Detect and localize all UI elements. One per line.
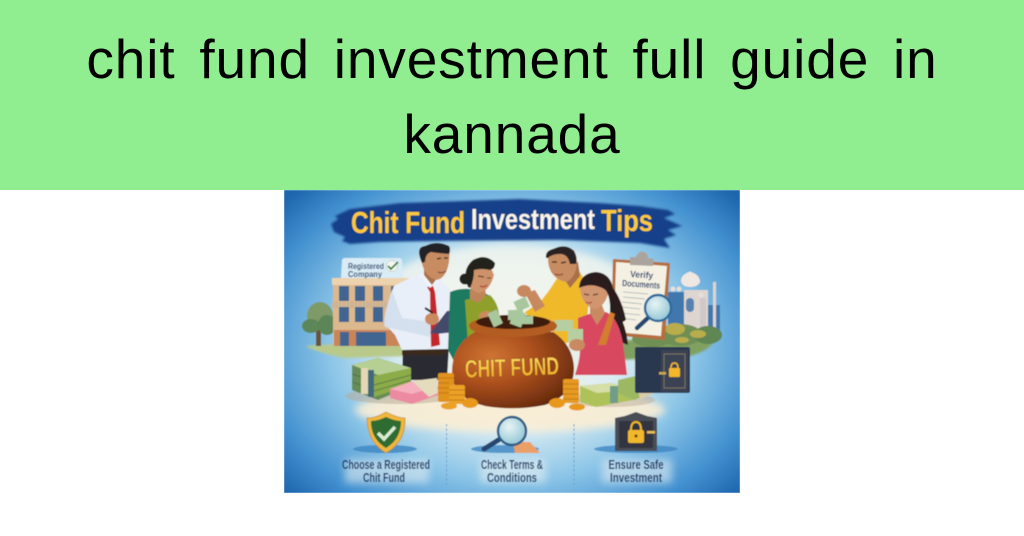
company sign: Company bbox=[348, 269, 382, 279]
clipboard verify documents bbox=[611, 252, 671, 340]
divider left bbox=[446, 424, 448, 485]
banner brush stroke bbox=[331, 199, 682, 248]
icon: safe with padlock bbox=[594, 412, 678, 453]
grass strip right bbox=[620, 338, 715, 360]
company sign bbox=[341, 258, 403, 279]
banner heading: Chit Fund bbox=[351, 205, 465, 240]
pink stack bbox=[390, 380, 438, 404]
label: ensure safe investment: Ensure Safe bbox=[608, 458, 664, 472]
label: check terms and conditions: Check Terms & bbox=[481, 458, 543, 472]
divider right bbox=[573, 424, 575, 485]
title banner bbox=[331, 199, 682, 248]
icon: registered shield bbox=[353, 412, 417, 453]
clipboard board bbox=[611, 259, 670, 340]
green stack bbox=[352, 358, 411, 400]
illustration: chit fund investment tips bbox=[284, 190, 740, 493]
pot rim bbox=[469, 315, 557, 337]
label: choose a registered chit fund: Choose a Registered bbox=[342, 458, 430, 472]
notes in pot bbox=[488, 297, 533, 328]
person: woman in green sari bbox=[448, 257, 500, 365]
clipboard text: Verify bbox=[630, 269, 654, 281]
clipboard verify documents: Documents bbox=[622, 278, 660, 291]
money and coins right bbox=[549, 375, 656, 410]
title bbox=[86, 28, 938, 165]
pot label: CHIT FUND bbox=[464, 352, 559, 384]
title: chit fund investment full guide in bbox=[86, 28, 938, 90]
face bbox=[552, 262, 566, 263]
taj mahal skyline bbox=[668, 272, 720, 335]
green stack front bbox=[580, 383, 633, 407]
face bbox=[437, 258, 448, 259]
banner heading middle: Investment bbox=[471, 204, 595, 236]
person: man in white shirt bbox=[384, 242, 451, 381]
pale label strips bbox=[345, 459, 672, 483]
neck and head bbox=[423, 270, 436, 286]
face bbox=[584, 294, 598, 295]
label: check terms and conditions bbox=[481, 458, 543, 485]
title: kannada bbox=[403, 103, 621, 165]
grass strip left bbox=[305, 342, 404, 360]
magnifier bbox=[637, 295, 671, 328]
red tie bbox=[427, 286, 440, 347]
chit fund pot bbox=[452, 297, 574, 408]
clipboard and hands bbox=[430, 310, 450, 334]
label: choose a registered chit fund: Chit Fund bbox=[363, 471, 405, 485]
company sign: Registered bbox=[348, 261, 384, 271]
pot body bbox=[452, 332, 574, 408]
clipboard clip bbox=[630, 252, 654, 266]
sky glow bbox=[402, 242, 614, 316]
tree left bbox=[302, 302, 336, 346]
windows bbox=[339, 286, 399, 346]
label: choose a registered chit fund bbox=[342, 458, 430, 485]
label: ensure safe investment bbox=[608, 458, 664, 485]
banner heading end: Tips bbox=[601, 203, 653, 238]
icon: magnifying glass with hand bbox=[471, 417, 540, 453]
money and coins left bbox=[345, 358, 478, 410]
bushes right bbox=[632, 323, 722, 347]
registered company building bbox=[332, 258, 410, 346]
face bbox=[478, 276, 491, 278]
green stack back bbox=[618, 375, 656, 400]
sandy ground bbox=[355, 388, 665, 432]
person: woman in pink dress bbox=[555, 272, 628, 375]
coin stacks bbox=[438, 373, 454, 402]
title band bbox=[0, 0, 1024, 190]
label: check terms and conditions: Conditions bbox=[487, 471, 537, 485]
money bundles in hands bbox=[555, 320, 573, 331]
label: ensure safe investment: Investment bbox=[610, 471, 663, 485]
background sky bbox=[284, 190, 740, 493]
safe bbox=[635, 347, 690, 393]
person: man in yellow shirt bbox=[517, 246, 590, 345]
